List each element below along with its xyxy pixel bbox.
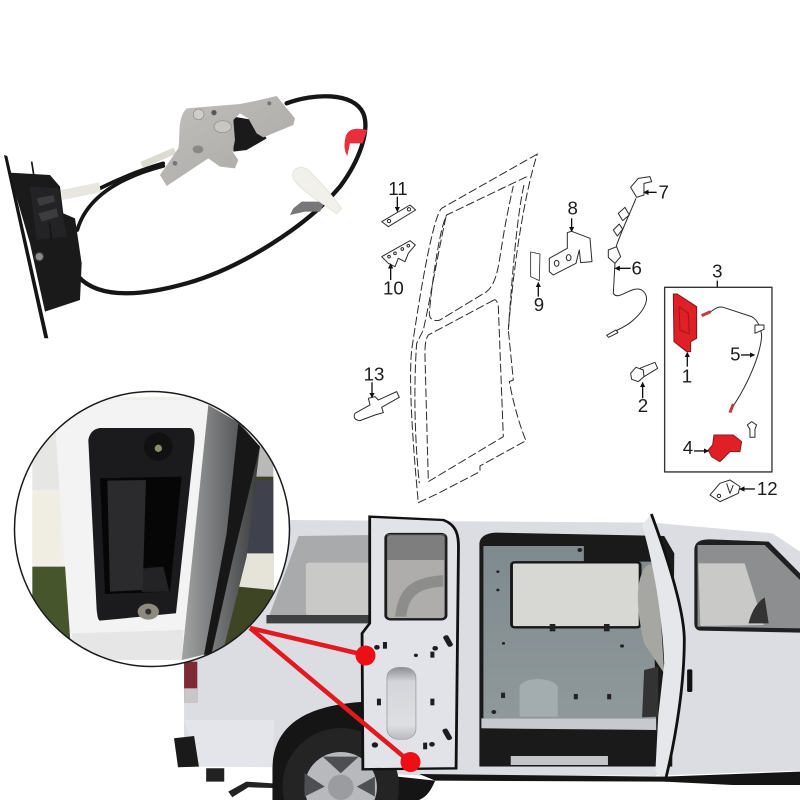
part 2 bolt: 2 (638, 395, 648, 416)
seat (638, 564, 664, 673)
part 10 hinge (382, 241, 415, 298)
white door frame (56, 429, 72, 640)
right side scene (256, 446, 274, 480)
part 8 bracket: 8 (567, 197, 578, 218)
part 4 red latch: 4 (683, 437, 693, 458)
callout: red leader lines with dots (250, 628, 420, 772)
part 12 bracket: 12 (757, 478, 778, 499)
part 11 plate (382, 178, 416, 227)
dashed door outline (411, 154, 537, 503)
zoom circle: handle close-up (14, 392, 290, 666)
van body (184, 520, 800, 777)
background scene (32, 397, 273, 660)
part 5 cable (702, 307, 764, 413)
part 3 kit box (665, 260, 772, 472)
part 13 pin: 13 (364, 363, 384, 384)
side door opening (465, 533, 674, 776)
part 13 pin (354, 363, 399, 421)
door holes (372, 635, 454, 749)
part 5 cable: 5 (730, 344, 740, 365)
parts 6 and 7 cable: 7 (658, 181, 669, 202)
tail light (184, 662, 197, 702)
parts 6 and 7 cable (607, 177, 669, 337)
part 3 kit box: 3 (712, 260, 722, 281)
door handle (687, 669, 692, 692)
photo: door latch and handle assembly (4, 96, 367, 338)
top screw (144, 432, 173, 461)
rear bumper (174, 736, 199, 767)
parts 6 and 7 cable: 6 (631, 258, 642, 279)
exploded parts diagram (354, 154, 778, 503)
sill line (419, 772, 800, 785)
part 1 red handle plate: 1 (682, 366, 692, 387)
part 1 red handle plate (673, 294, 697, 387)
small bolt (747, 422, 757, 437)
gasket (182, 405, 260, 660)
part 12 bracket (710, 478, 778, 502)
side door open (642, 514, 684, 782)
handle recess (100, 477, 182, 594)
wheel well (520, 679, 558, 717)
door access hole (387, 667, 416, 739)
part 10 hinge: 10 (383, 277, 404, 298)
floor (481, 718, 656, 730)
part 8 bracket (549, 197, 592, 275)
part 2 bolt (631, 362, 658, 416)
sill (465, 767, 656, 776)
handle housing (4, 155, 82, 338)
dot: upper mount (356, 646, 376, 666)
rear side window (266, 535, 374, 623)
wall holes (491, 548, 624, 714)
body shading (184, 720, 274, 767)
rear door open (362, 517, 458, 769)
bottom screw (138, 604, 159, 620)
cables (62, 96, 365, 293)
front door window (694, 539, 800, 633)
handle bar (107, 480, 146, 592)
part 4 red latch (683, 435, 742, 462)
white clip and tape (290, 167, 342, 215)
part 11 plate: 11 (388, 178, 408, 199)
red tag (344, 129, 367, 156)
part 9 strip (531, 252, 544, 315)
wheel arch and tyre (272, 702, 435, 800)
part 9 strip: 9 (534, 294, 544, 315)
latch plate (160, 96, 295, 186)
black plate (88, 428, 195, 621)
dot: lower mount (400, 752, 420, 772)
interior wall (483, 546, 656, 718)
hitch (206, 768, 283, 797)
photo: white van with rear and side doors open (174, 514, 800, 800)
